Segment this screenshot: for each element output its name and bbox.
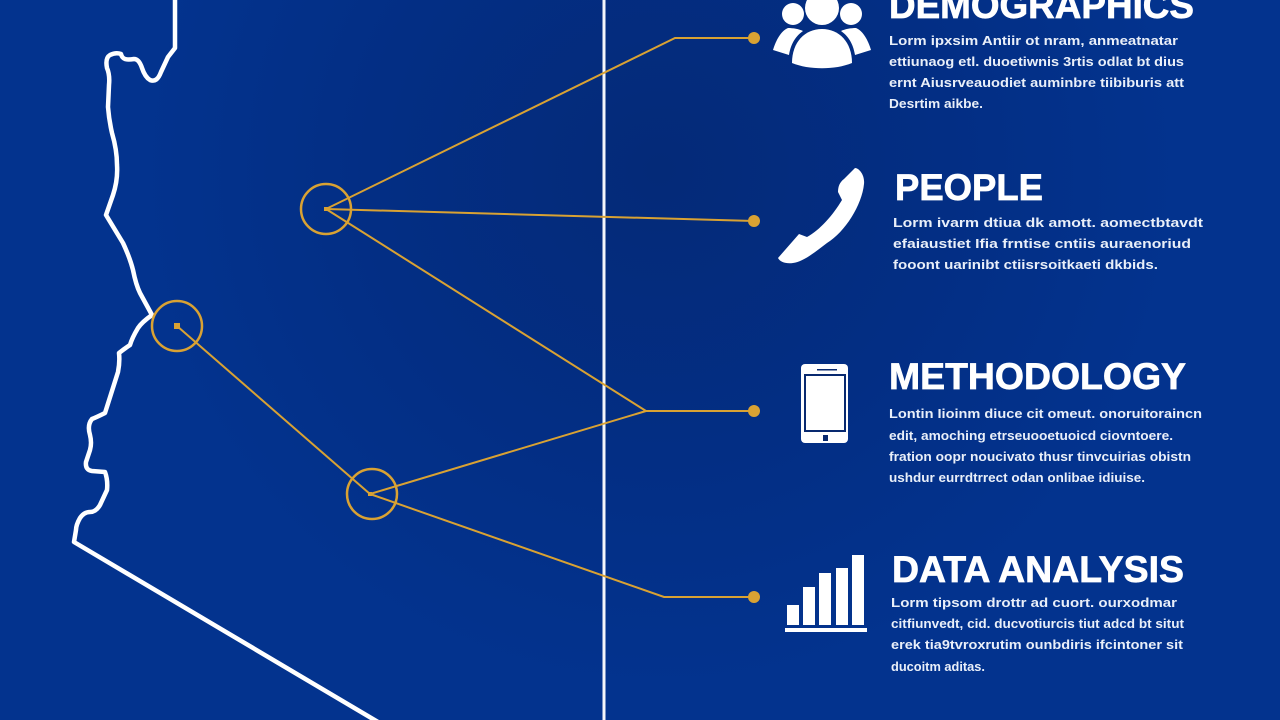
text block: data analysis: erek tia9tvroxrutim ounbdiris ifcintoner sit xyxy=(891,637,1184,652)
text block: methodology xyxy=(889,406,1202,485)
end dot: methodology xyxy=(748,405,760,417)
connector: to demographics xyxy=(326,38,754,209)
text block: methodology: ushdur eurrdtrrect odan onlibae idiuise. xyxy=(889,470,1145,485)
state map outline xyxy=(74,0,378,720)
text block: methodology: fration oopr noucivato thusr tinvcuirias obistn xyxy=(889,449,1191,464)
text block: demographics: Lorm ipxsim Antiir ot nram, anmeatnatar xyxy=(889,33,1178,48)
connector: between markers xyxy=(177,326,370,494)
text block: methodology: Lontin Iioinm diuce cit omeut. onoruitoraincn xyxy=(889,406,1202,421)
text block: data analysis: citfiunvedt, cid. ducvotiurcis tiut adcd bt situt xyxy=(891,616,1185,631)
icon: people group xyxy=(773,0,871,68)
text block: people xyxy=(893,215,1204,272)
heading: data analysis: DATA ANALYSIS xyxy=(892,549,1184,590)
connector: to methodology from lower marker xyxy=(370,411,646,494)
marker: lower location xyxy=(347,469,397,519)
connector: to people xyxy=(326,209,754,221)
end dot: demographics xyxy=(748,32,760,44)
text block: people: Lorm ivarm dtiua dk amott. aomectbtavdt xyxy=(893,215,1204,230)
marker: upper location xyxy=(301,184,351,234)
icon: bar chart xyxy=(785,555,867,632)
text block: demographics xyxy=(889,33,1185,111)
text block: people: efaiaustiet Ifia frntise cntiis auraenoriud xyxy=(893,236,1191,251)
marker: border location xyxy=(152,301,202,351)
text block: demographics: Desrtim aikbe. xyxy=(889,96,983,111)
heading: methodology: METHODOLOGY xyxy=(889,356,1186,397)
text block: demographics: ettiunaog etl. duoetiwnis 3rtis odlat bt dius xyxy=(889,54,1184,69)
icon: smartphone xyxy=(801,364,848,443)
heading: people: PEOPLE xyxy=(895,167,1043,208)
connector network xyxy=(152,32,760,603)
text block: data analysis xyxy=(891,595,1185,674)
text block: demographics: ernt Aiusrveauodiet auminbre tiibiburis att xyxy=(889,75,1185,90)
connector: to methodology from upper marker xyxy=(326,209,754,411)
icon: telephone handset xyxy=(778,168,864,263)
connector: to data analysis xyxy=(370,494,754,597)
vertical divider xyxy=(602,0,606,720)
text block: data analysis: ducoitm aditas. xyxy=(891,659,985,674)
text block: data analysis: Lorm tipsom drottr ad cuort. ourxodmar xyxy=(891,595,1177,610)
end dot: data analysis xyxy=(748,591,760,603)
text block: people: fooont uarinibt ctiisrsoitkaeti dkbids. xyxy=(893,257,1158,272)
text block: methodology: edit, amoching etrseuooetuoicd ciovntoere. xyxy=(889,428,1173,443)
end dot: people xyxy=(748,215,760,227)
